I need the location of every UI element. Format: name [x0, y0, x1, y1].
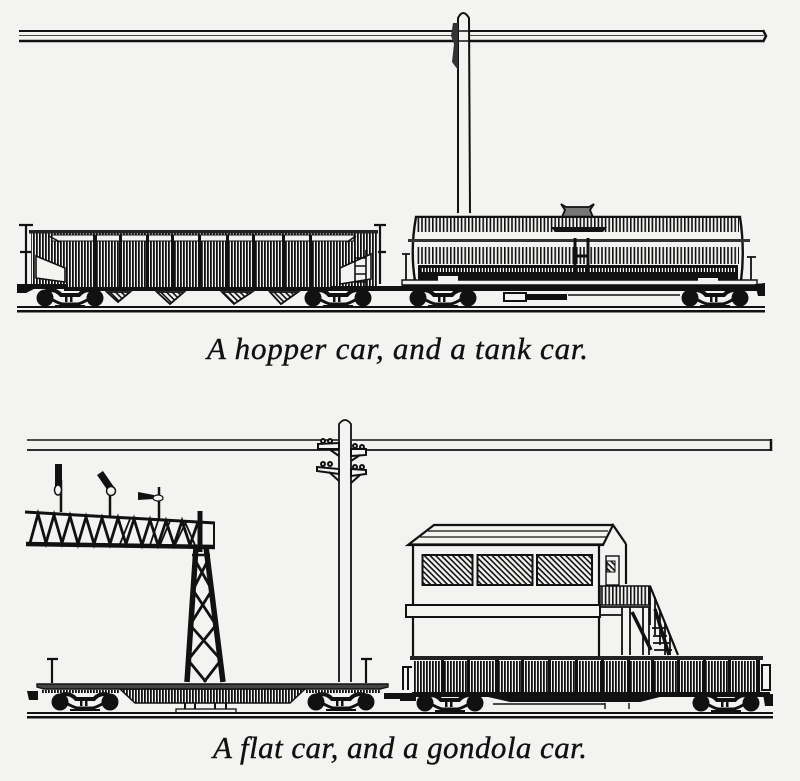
- porch supports: [600, 607, 649, 655]
- flat car couplers: [27, 691, 412, 700]
- flat car deck: [37, 684, 388, 689]
- signal bridge truss: [25, 512, 215, 547]
- panel: hopper car and tank car: [17, 13, 766, 366]
- cabin door: [606, 556, 619, 585]
- hopper top rail: [29, 230, 378, 234]
- flat car trucks: [52, 694, 374, 711]
- caption top: A hopper car, and a tank car.: [205, 331, 588, 366]
- flat car stanchions: [47, 659, 372, 683]
- flat car belly: [120, 689, 305, 703]
- caption bottom: A flat car, and a gondola car.: [211, 730, 587, 765]
- cabin windows: [422, 555, 592, 585]
- hopper stanchions: [19, 225, 386, 284]
- pole crossarms: [317, 439, 366, 483]
- overhead wires bottom: [27, 439, 771, 451]
- tank frame: [402, 276, 757, 291]
- flat car side dashes: [42, 690, 381, 693]
- gondola car: [400, 656, 773, 712]
- hopper ladder: [355, 250, 366, 292]
- gondola trucks: [416, 694, 760, 712]
- panel: flat car and gondola car: [25, 420, 773, 765]
- signal tower: [187, 511, 223, 682]
- tank shadow band: [418, 265, 738, 282]
- flat car: [27, 659, 412, 713]
- hopper body hatching: [31, 232, 378, 288]
- cabin roof: [408, 525, 626, 545]
- tank ladder: [575, 238, 588, 278]
- stairs: [632, 586, 678, 655]
- telegraph pole top: [451, 13, 470, 213]
- cabin walls: [413, 544, 626, 656]
- hopper trucks: [36, 290, 372, 307]
- gondola fish belly: [412, 692, 770, 702]
- tank lower hatching: [417, 247, 739, 264]
- telegraph pole bottom: [317, 420, 366, 682]
- tank valve gear: [504, 293, 680, 301]
- gondola posts: [441, 660, 760, 693]
- overhead wires top: [19, 30, 766, 42]
- hopper underframe: [64, 287, 344, 291]
- hopper top band: [49, 235, 356, 242]
- track top: [17, 306, 765, 312]
- track bottom: [27, 712, 773, 718]
- hopper posts: [93, 235, 312, 288]
- gondola top rail: [410, 656, 763, 660]
- gondola body hatching: [414, 661, 760, 693]
- cabin roof lines: [411, 531, 608, 544]
- gondola brake rod: [493, 703, 629, 709]
- tank car: [402, 204, 765, 307]
- gondola end detail: [402, 665, 770, 690]
- hopper couplers and frame ends: [17, 284, 404, 293]
- tank coupler: [755, 283, 765, 296]
- hopper car: [17, 225, 404, 307]
- signal arms: [54, 464, 163, 519]
- tank side rail: [408, 239, 750, 242]
- gondola coupler: [400, 694, 773, 706]
- hopper discharge chutes: [107, 292, 298, 304]
- signal cabin: [406, 525, 678, 656]
- porch railing: [600, 586, 650, 605]
- tank dome: [561, 204, 594, 217]
- cabin gallery band: [406, 605, 600, 617]
- tank upper hatching: [417, 218, 739, 232]
- tank stanchions: [402, 254, 756, 282]
- tank shell: [413, 217, 743, 281]
- tower base: [176, 703, 236, 713]
- tank grab plate: [551, 227, 607, 232]
- hopper end sheets: [36, 254, 371, 284]
- tank trucks: [410, 290, 748, 307]
